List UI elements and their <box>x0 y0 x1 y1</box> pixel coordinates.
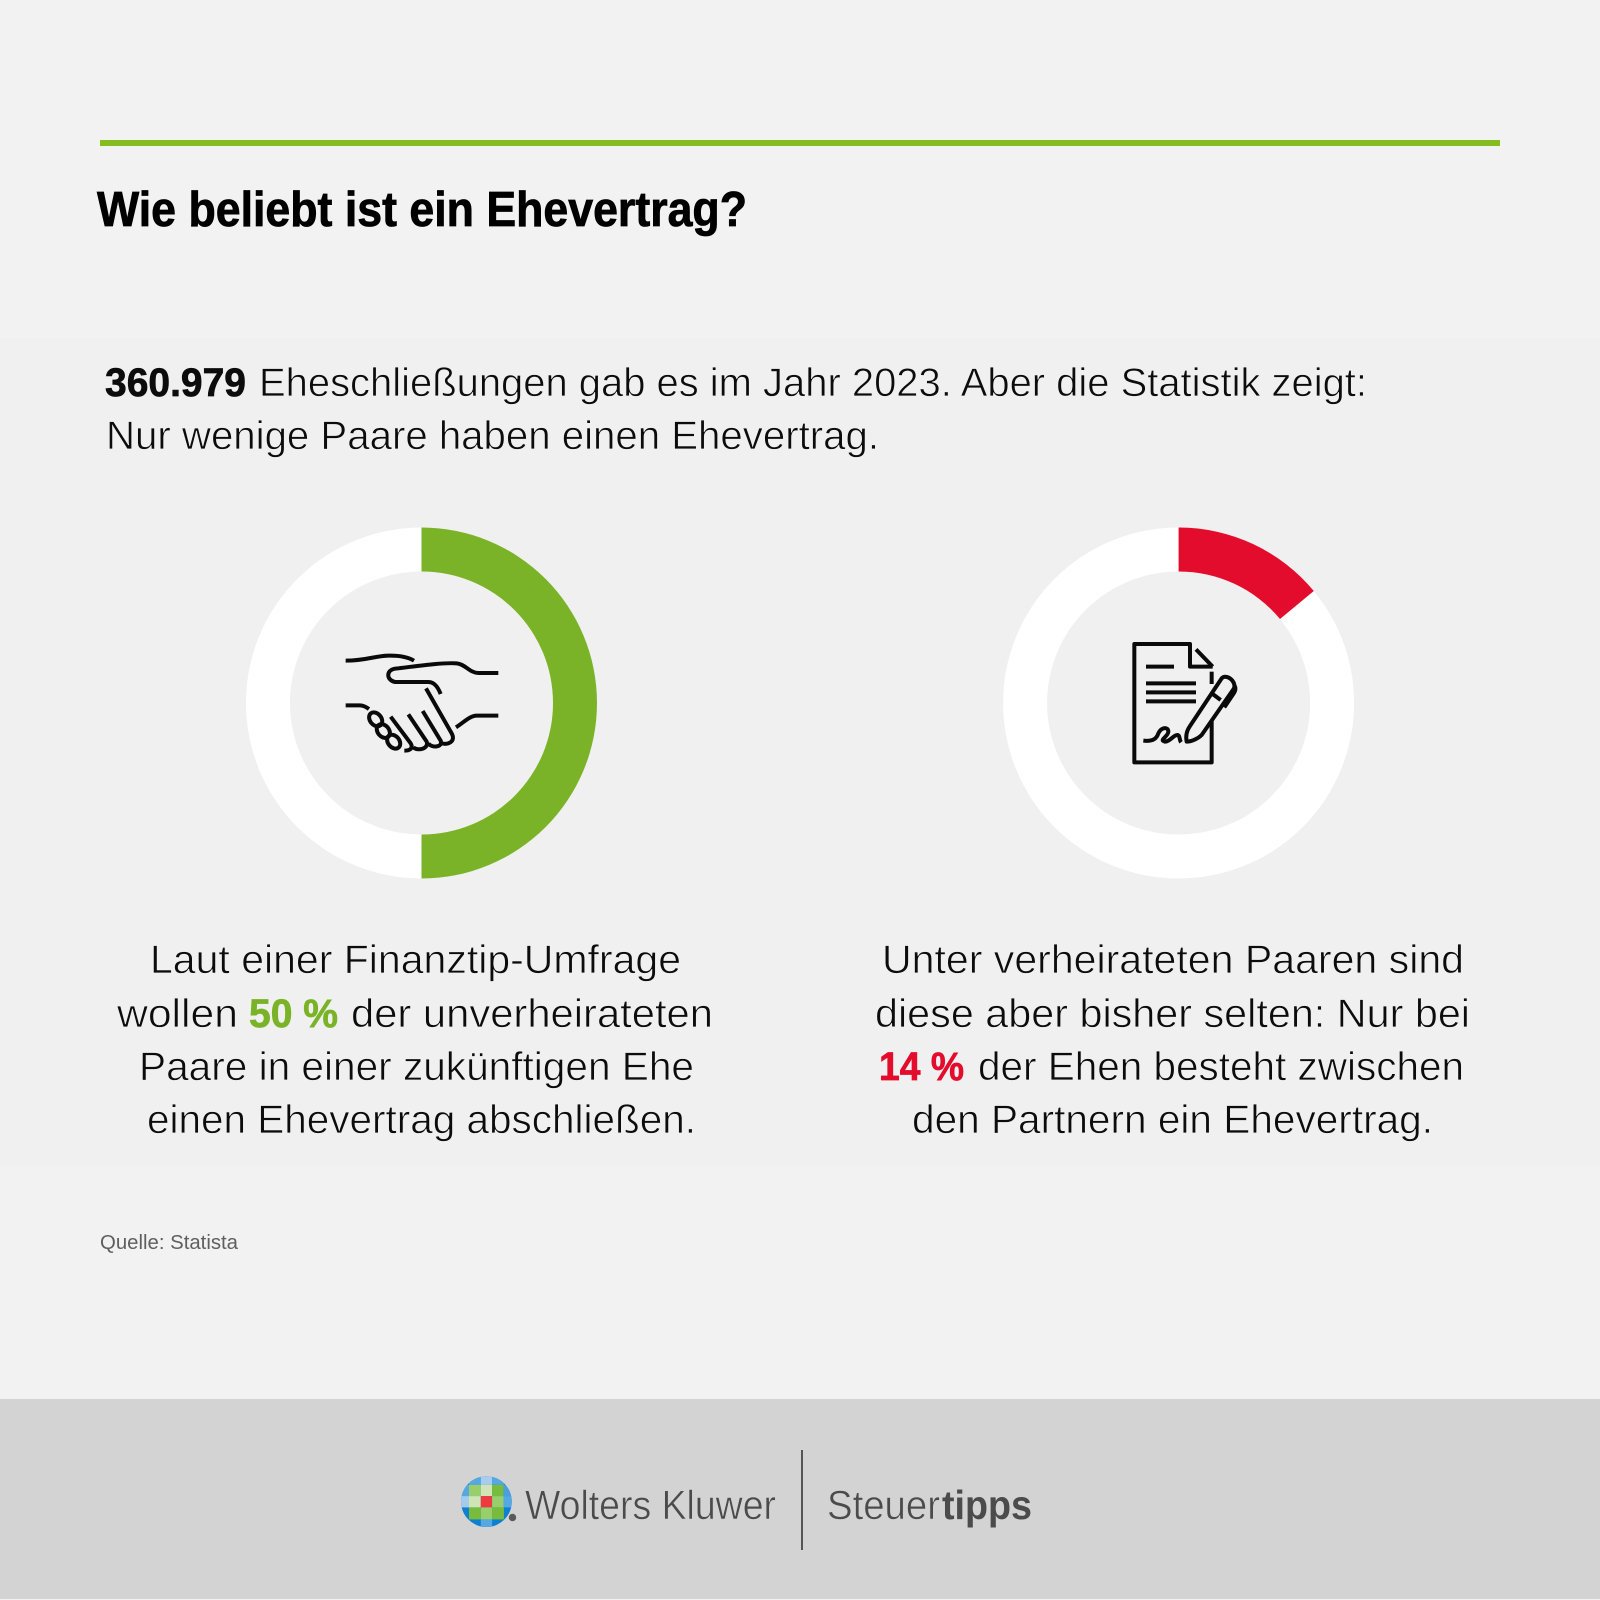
logo: Steuertipps: Steuer <box>827 1482 940 1528</box>
text block: right caption: den Partnern ein Ehevertrag. <box>912 1098 1433 1142</box>
panel: footer band <box>0 1399 1600 1599</box>
text block: right caption: der Ehen besteht zwischen <box>978 1045 1464 1089</box>
logo divider <box>801 1450 803 1550</box>
text block: left caption <box>116 938 713 1142</box>
text block: right caption: Unter verheirateten Paaren sind <box>882 938 1464 982</box>
donut track <box>268 550 575 856</box>
text block: right caption <box>875 938 1470 1142</box>
text block: left caption: Laut einer Finanztip-Umfrage <box>150 938 681 982</box>
intro text: Eheschließungen gab es im Jahr 2023. Aber die Statistik zeigt: <box>259 361 1367 405</box>
text block: left caption: einen Ehevertrag abschließen. <box>147 1098 696 1142</box>
source note: Quelle: Statista <box>100 1232 239 1254</box>
panel: content band <box>0 339 1600 1166</box>
intro text <box>105 361 1367 458</box>
logo: Wolters Kluwer <box>461 1476 776 1527</box>
highlight: 50 %: 50 % <box>249 992 338 1036</box>
donut value 14 % <box>1179 528 1314 619</box>
text block: right caption: diese aber bisher selten: Nur bei <box>875 992 1470 1036</box>
highlight: 14 %: 14 % <box>879 1045 964 1089</box>
icon: signed contract <box>1134 644 1235 762</box>
intro text: 360.979 <box>105 361 246 405</box>
green header rule <box>100 140 1500 146</box>
panel: 50 percent donut <box>268 528 597 878</box>
icon: globe <box>461 1476 512 1527</box>
title: Wie beliebt ist ein Ehevertrag? <box>97 183 747 237</box>
logo: Steuertipps: tipps <box>942 1482 1032 1528</box>
intro text: Nur wenige Paare haben einen Ehevertrag. <box>106 414 879 458</box>
text block: left caption: der unverheirateten <box>351 992 713 1036</box>
panel: 14 percent donut <box>1025 528 1332 856</box>
donut value 50 % <box>422 528 597 878</box>
text block: left caption: wollen <box>116 992 238 1036</box>
logo: Steuertipps <box>827 1482 1032 1528</box>
text block: left caption: Paare in einer zukünftigen Ehe <box>139 1045 694 1089</box>
icon: handshake <box>346 656 498 751</box>
icon: registered mark <box>509 1514 516 1521</box>
wordmark: Wolters Kluwer: Wolters Kluwer <box>525 1482 776 1528</box>
donut track <box>1025 550 1332 856</box>
